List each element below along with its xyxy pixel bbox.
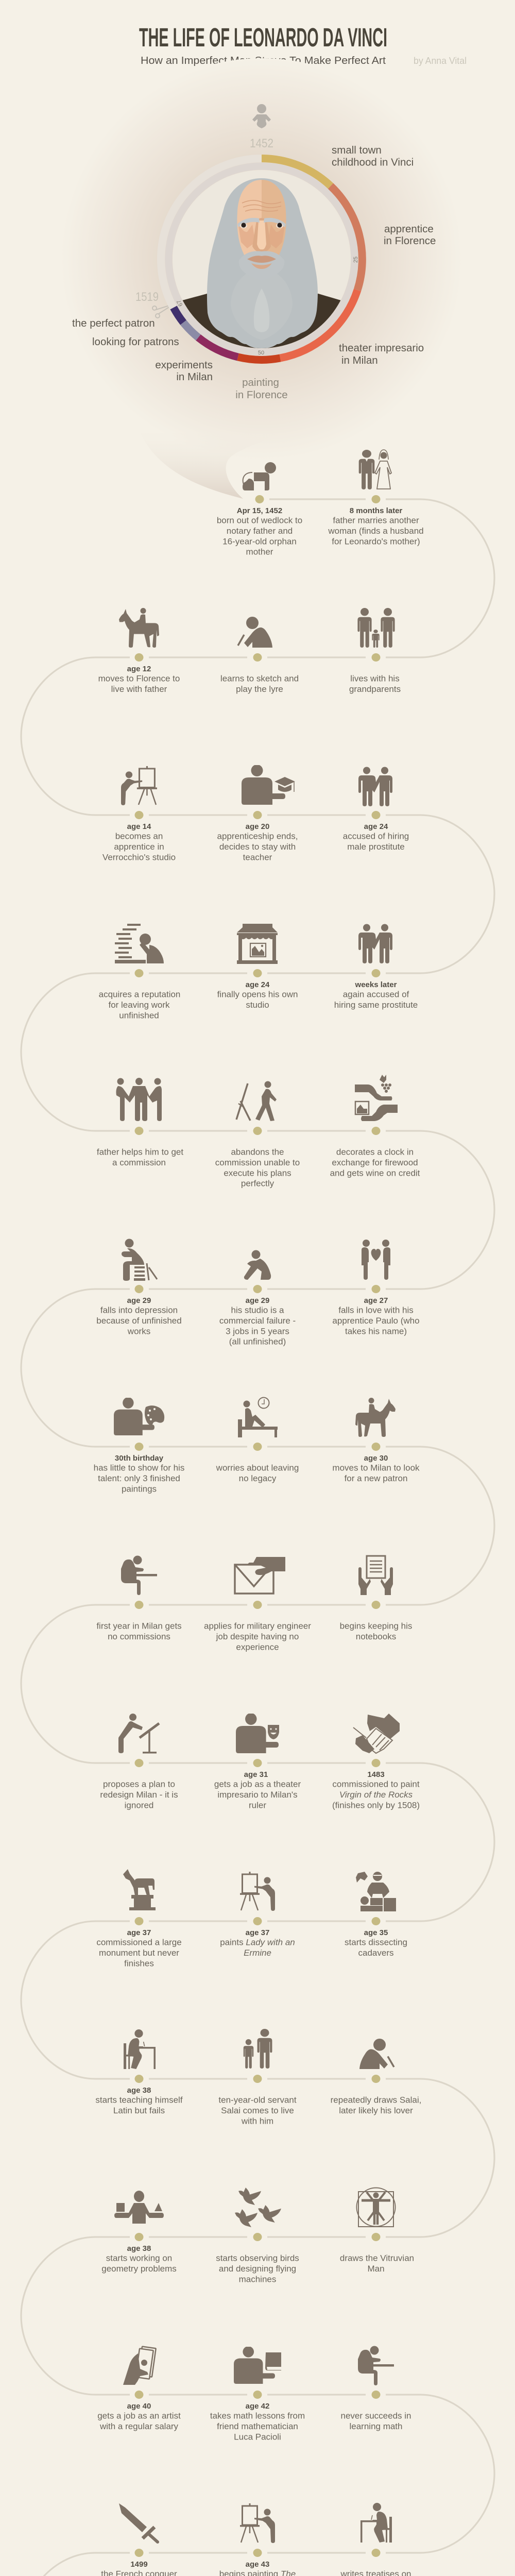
text: Virgin of the Rocks <box>339 1790 413 1800</box>
text: accused of hiring <box>343 832 409 841</box>
event: large monument <box>96 1869 182 1968</box>
text: remarries: woman (finds a husband <box>328 526 424 536</box>
event: math lessons <box>210 2346 305 2442</box>
stage label: the perfect patron: the perfect patron <box>72 317 155 329</box>
text: age 40 <box>127 2402 151 2411</box>
text: hiring same prostitute <box>334 1000 418 1010</box>
text: works <box>127 1326 150 1336</box>
text: again accused of <box>343 989 409 999</box>
icon: man with geometric shapes <box>114 2191 164 2224</box>
text: for leaving work <box>108 1000 170 1010</box>
text: born: born out of wedlock to <box>217 515 302 526</box>
text: friend mathematician <box>217 2421 298 2431</box>
age ticks: 67 <box>176 299 184 308</box>
text: talent: only 3 finished <box>98 1473 180 1483</box>
text: monument but never <box>99 1948 179 1958</box>
text: 1499 <box>130 2560 148 2569</box>
event: never succeeds <box>340 2346 411 2431</box>
life stage arc: apprentice in Florence <box>331 186 362 290</box>
timeline events <box>91 450 431 2576</box>
icon: hands exchange painting for wine <box>355 1075 398 1121</box>
life stage arc: theater impresario in Milan <box>280 290 357 358</box>
text: age 20 <box>246 822 269 831</box>
event: sketch and lyre <box>220 617 299 694</box>
eyebrows <box>237 218 286 227</box>
text: remarries: for Leonardo's mother) <box>332 536 420 546</box>
text: remarries: 8 months later <box>350 506 402 515</box>
nose <box>252 218 271 252</box>
icon: family <box>357 608 395 648</box>
event: apprentice <box>102 766 176 862</box>
eyes <box>240 223 247 228</box>
stage label: painting: painting <box>242 377 279 388</box>
moustache and lower beard <box>244 251 279 273</box>
event: theater impresario <box>214 1713 301 1810</box>
icon: two men <box>358 767 392 806</box>
text: Ermine <box>244 1948 271 1958</box>
text: age 27 <box>364 1296 388 1305</box>
text: decides to stay with <box>219 842 296 852</box>
text: execute his plans <box>224 1168 291 1178</box>
icon: man with palette <box>114 1397 164 1435</box>
text: age 29 <box>246 1296 269 1305</box>
text: remarries: father marries another <box>333 515 419 526</box>
text: exchange for firewood <box>332 1158 418 1167</box>
text: repeatedly draws Salai, <box>331 2095 421 2105</box>
portrait ring <box>161 159 363 360</box>
text: ignored <box>125 1800 153 1810</box>
text: starts observing birds <box>216 2253 299 2263</box>
text: apprentice Paulo (who <box>332 1316 420 1326</box>
stage label: childhood: childhood in Vinci <box>332 157 414 168</box>
event: draws Salai <box>331 2039 421 2115</box>
stage label: looking for patrons: looking for patrons <box>92 336 179 348</box>
text: ruler <box>249 1800 266 1810</box>
text: falls in love with his <box>338 1306 414 1315</box>
icon: person sketching <box>238 617 272 648</box>
text: starts dissecting <box>345 1937 407 1947</box>
icon: hands holding notebook <box>358 1556 393 1595</box>
stage label: painting: in Florence <box>235 389 288 401</box>
event: notebooks <box>340 1556 412 1641</box>
icon: man sitting on stack <box>122 1239 157 1281</box>
text: with a regular salary <box>99 2421 179 2431</box>
icon: painter at easel <box>240 1872 275 1911</box>
icon: crawling baby <box>243 462 276 490</box>
icon: hand with money <box>123 2346 156 2385</box>
mouth <box>247 256 276 263</box>
text: unfinished <box>119 1010 159 1020</box>
text: ten-year-old servant <box>218 2095 297 2105</box>
text: age 29 <box>127 1296 151 1305</box>
text: Man <box>367 2264 385 2274</box>
event: first year Milan <box>96 1556 182 1641</box>
icon: boy and man <box>244 2029 272 2069</box>
stage label: childhood: small town <box>332 144 382 156</box>
text: live with father <box>111 684 167 694</box>
event: Virgin of the Rocks <box>332 1714 420 1810</box>
text: proposes a plan to <box>103 1780 175 1789</box>
event: geometry <box>101 2191 177 2274</box>
life stage arc: childhood in Vinci <box>262 159 331 186</box>
text: moves to Milan to look <box>332 1463 420 1472</box>
text: age 38 <box>127 2244 151 2253</box>
event: depression <box>96 1239 182 1336</box>
icon: handshake <box>353 1714 400 1753</box>
text: applies for military engineer <box>204 1621 311 1631</box>
icon: sword <box>119 2503 158 2542</box>
text: falls into depression <box>100 1306 178 1315</box>
text: age 42 <box>246 2402 269 2411</box>
text: finally opens his own <box>217 989 298 999</box>
icon: baby <box>252 104 271 128</box>
stage label: apprentice: apprentice <box>384 223 434 235</box>
event: Lady with an Ermine <box>220 1872 295 1958</box>
text: born: mother <box>246 547 273 557</box>
text: no commissions <box>108 1632 170 1641</box>
text: Latin but fails <box>113 2106 165 2115</box>
icon: man at drafting table <box>118 1714 159 1754</box>
icon: scissors <box>152 305 171 318</box>
hair and beard <box>207 178 318 348</box>
text: age 37 <box>246 1928 269 1937</box>
text: learns to sketch and <box>220 674 299 683</box>
text: experience <box>236 1642 279 1652</box>
icon: person hugging knees <box>244 1250 271 1280</box>
text: paintings <box>122 1484 157 1494</box>
stage label: apprentice: in Florence <box>384 235 436 247</box>
age ticks: 25 <box>353 257 359 263</box>
text: age 37 <box>127 1928 151 1937</box>
text: born: Apr 15, 1452 <box>237 506 282 515</box>
icon: three men <box>116 1078 162 1121</box>
text: apprentice in <box>114 842 164 852</box>
icon: hand with letter <box>235 1557 285 1594</box>
icon: painter at easel <box>240 2503 275 2543</box>
text: 30th birthday <box>115 1454 164 1463</box>
text: draws the Vitruvian <box>340 2253 414 2263</box>
icon: person sketching <box>359 2039 394 2069</box>
age ticks: 50 <box>258 350 264 356</box>
text: never succeeds in <box>340 2411 411 2420</box>
icon: horse statue <box>123 1869 156 1910</box>
text: acquires a reputation <box>99 989 180 999</box>
text: 1483 <box>367 1770 385 1779</box>
text: and designing flying <box>219 2264 296 2274</box>
text: (finishes only by 1508) <box>332 1800 420 1810</box>
event: Latin <box>95 2029 183 2115</box>
life stage arc: looking for patrons <box>183 323 198 337</box>
event: military engineer <box>204 1557 311 1652</box>
text: perfectly <box>241 1179 274 1189</box>
life stage arc: painting in Florence <box>238 357 280 360</box>
age ticks <box>176 257 359 356</box>
icon: painter at easel <box>121 766 157 805</box>
event: 30th birthday <box>94 1397 184 1494</box>
event: accused again <box>334 924 418 1010</box>
byline: by Anna Vital <box>414 56 467 66</box>
text: Luca Pacioli <box>234 2432 281 2442</box>
text: takes his name) <box>345 1326 407 1336</box>
life stage arc: the perfect patron <box>174 308 183 323</box>
text: commercial failure - <box>219 1316 296 1326</box>
text: born: notary father and <box>227 526 293 536</box>
text: age 12 <box>127 665 151 673</box>
icon: seated at table <box>358 2346 394 2385</box>
soft glow behind portrait <box>61 58 462 460</box>
subtitle: How an Imperfect Man Strove To Make Perfect Art <box>141 55 386 66</box>
text: begins keeping his <box>340 1621 412 1631</box>
event: birds <box>216 2188 299 2284</box>
event: dissecting <box>345 1872 407 1958</box>
text: impresario to Milan's <box>217 1790 298 1800</box>
text: a commission <box>112 1158 166 1167</box>
text: notebooks <box>356 1632 396 1641</box>
text: gets a job as an artist <box>97 2411 181 2420</box>
event: birth <box>217 462 302 557</box>
icon: man with book <box>234 2346 281 2384</box>
text: machines <box>239 2274 276 2284</box>
event: own studio <box>217 924 298 1010</box>
text: father helps him to get <box>97 1147 183 1157</box>
text: age 24 <box>246 980 270 989</box>
text: age 24 <box>364 822 388 831</box>
text: Salai comes to live <box>221 2106 294 2115</box>
text: worries about leaving <box>216 1463 299 1472</box>
event: moves to Milan <box>332 1398 420 1483</box>
icon: dissection <box>356 1872 396 1911</box>
icon: birds <box>235 2188 281 2227</box>
icon: man with graduation cap <box>242 765 295 805</box>
event: French conquer Milan <box>101 2503 177 2576</box>
event: regular salary <box>97 2346 181 2431</box>
face skin <box>237 180 262 255</box>
stage label: experiments: in Milan <box>176 371 213 383</box>
icon: rider <box>119 608 159 648</box>
event: treatises <box>334 2503 418 2576</box>
text: finishes <box>124 1958 154 1968</box>
text: starts teaching himself <box>95 2095 183 2105</box>
icon: person in bed with clock <box>238 1397 278 1437</box>
text: 3 jobs in 5 years <box>226 1326 289 1336</box>
icon: writer at desk <box>360 2503 392 2543</box>
text: studio <box>246 1000 269 1010</box>
text: has little to show for his <box>94 1463 184 1472</box>
event: decorates clock <box>330 1075 420 1178</box>
icon: bride and groom <box>359 450 391 489</box>
stage label: experiments: experiments <box>155 359 213 371</box>
text: lives with his <box>350 674 400 683</box>
text: gets a job as a theater <box>214 1780 301 1789</box>
text: (all unfinished) <box>229 1337 286 1347</box>
portrait of Leonardo <box>182 178 341 348</box>
event: father remarries <box>328 450 424 546</box>
glow tail toward first event <box>140 433 281 499</box>
text: born: 16-year-old orphan <box>222 536 297 546</box>
text: abandons the <box>231 1147 284 1157</box>
life stage arc: experiments in Milan <box>198 337 238 357</box>
text: starts working on <box>106 2253 172 2263</box>
text: play the lyre <box>236 684 283 694</box>
icon: writer at desk <box>124 2029 156 2069</box>
icon: seated at table <box>121 1556 157 1595</box>
text: commissioned a large <box>96 1937 182 1947</box>
text: moves to Florence to <box>98 674 180 683</box>
icon: rider <box>355 1398 396 1437</box>
text: age 30 <box>364 1454 388 1463</box>
event: grandparents <box>349 608 401 694</box>
text: Verrocchio's studio <box>102 852 176 862</box>
text: age 31 <box>244 1770 268 1779</box>
text: for a new patron <box>345 1473 407 1483</box>
text: his studio is a <box>231 1306 284 1315</box>
icon: shop <box>237 924 278 964</box>
text: job despite having no <box>216 1632 299 1641</box>
text: decorates a clock in <box>336 1147 414 1157</box>
stage label: theater impresario: theater impresario <box>339 342 424 354</box>
text: later likely his lover <box>339 2106 413 2115</box>
event: Salai <box>218 2029 297 2126</box>
text: age 38 <box>127 2086 151 2095</box>
event: father helps <box>97 1078 183 1167</box>
icon: couple with heart <box>362 1240 390 1280</box>
text: geometry problems <box>101 2264 177 2274</box>
icon: walking away from easel <box>236 1081 277 1121</box>
event: apprenticeship ends <box>217 765 298 862</box>
event: worries <box>216 1397 299 1483</box>
text: age 35 <box>364 1928 388 1937</box>
text: and gets wine on credit <box>330 1168 420 1178</box>
text: teacher <box>243 852 272 862</box>
text: first year in Milan gets <box>96 1621 182 1631</box>
timeline path <box>21 499 494 2576</box>
cheek shadows <box>238 223 285 248</box>
icon: two men <box>358 924 392 963</box>
event: falls in love <box>332 1240 420 1336</box>
text: weeks later <box>355 980 397 989</box>
event: moves to Florence <box>98 608 180 694</box>
text: age 43 <box>246 2560 269 2569</box>
event: accused <box>343 767 409 852</box>
text: age 14 <box>127 822 151 831</box>
text: because of unfinished <box>96 1316 182 1326</box>
shoulders <box>182 294 341 348</box>
text: no legacy <box>239 1473 277 1483</box>
text: learning math <box>349 2421 403 2431</box>
text: apprenticeship ends, <box>217 832 298 841</box>
text: redesign Milan - it is <box>100 1790 178 1800</box>
event: studio fails <box>219 1250 296 1347</box>
text: takes math lessons from <box>210 2411 305 2420</box>
event: abandons commission <box>215 1081 300 1189</box>
text: grandparents <box>349 684 401 694</box>
text: with him <box>241 2116 273 2126</box>
birth year: 1452 <box>250 137 273 150</box>
icon: man with theater mask <box>236 1713 279 1753</box>
event: Last Supper <box>216 2503 299 2576</box>
icon: man with stack of work <box>115 924 164 963</box>
death year: 1519 <box>135 290 159 304</box>
event: reputation <box>99 924 180 1020</box>
event: redesign Milan <box>100 1714 178 1810</box>
event: Vitruvian Man <box>340 2188 414 2274</box>
text: commission unable to <box>215 1158 300 1167</box>
text: commissioned to paint <box>332 1780 420 1789</box>
text: male prostitute <box>347 842 405 852</box>
forehead wrinkles <box>242 200 281 211</box>
text: cadavers <box>358 1948 393 1958</box>
icon: Vitruvian Man <box>356 2188 396 2227</box>
stage label: theater impresario: in Milan <box>341 354 378 366</box>
text: becomes an <box>115 832 163 841</box>
text: paints Lady with an <box>220 1937 295 1947</box>
